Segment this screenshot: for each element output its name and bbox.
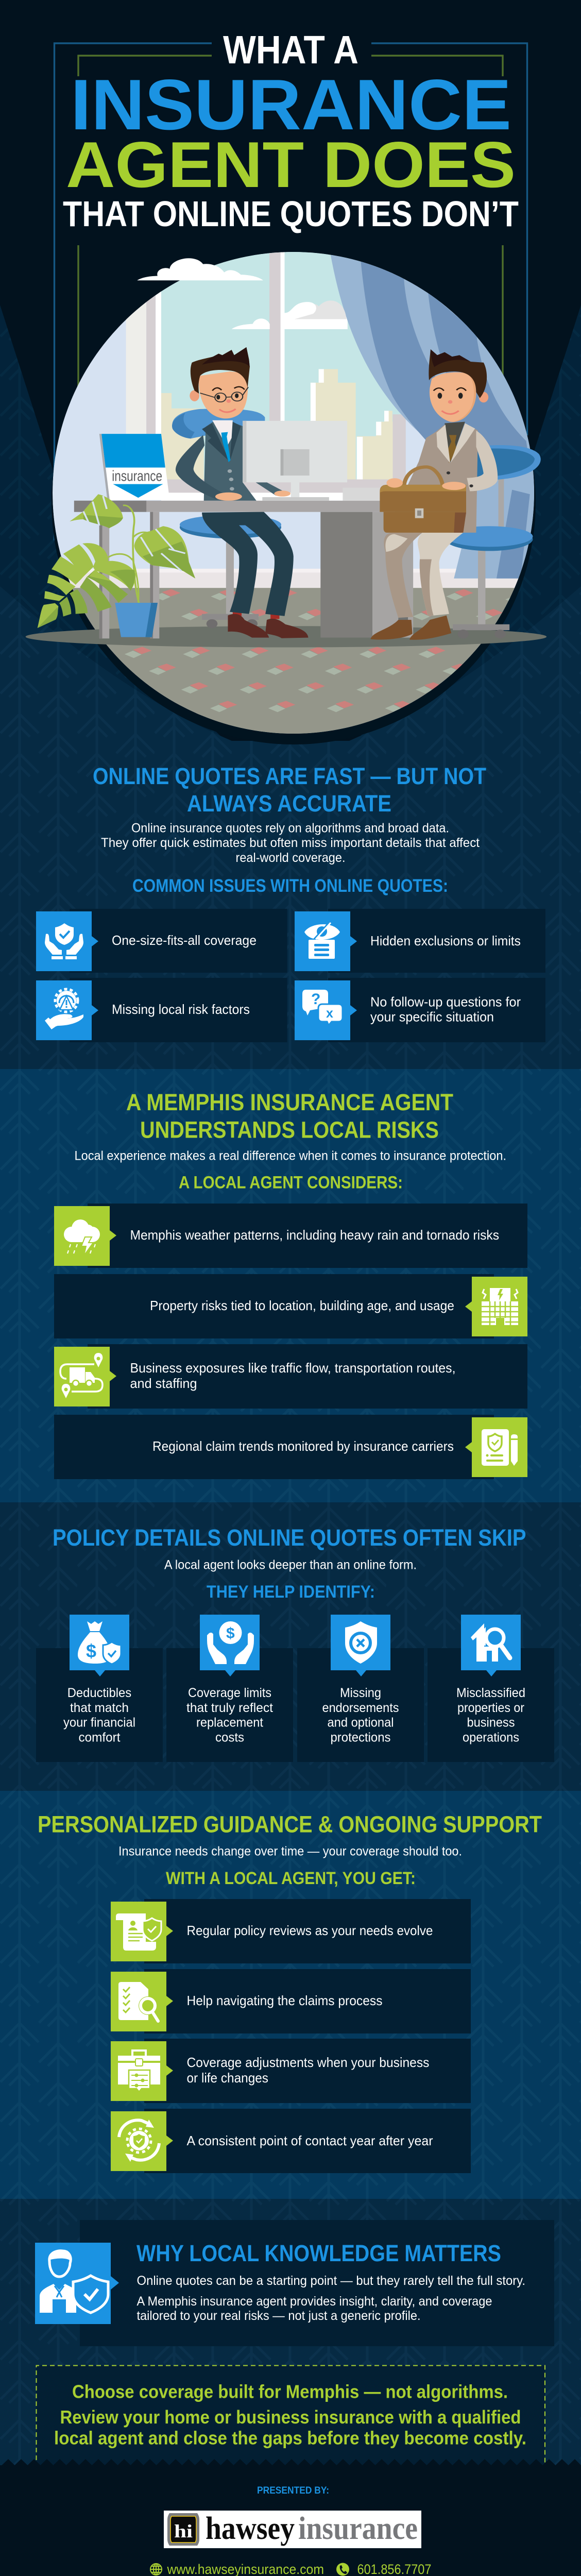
callout: call to action: Choose coverage built for Memphis — not algorithms. xyxy=(72,2381,508,2402)
icon: briefcase and settings document xyxy=(118,2050,160,2092)
clouds xyxy=(137,258,270,329)
callout: call to action: Review your home or business insurance with a qualified xyxy=(60,2406,521,2428)
card: missing endorsements: protections xyxy=(331,1730,390,1744)
heading xyxy=(126,1089,453,1143)
icon: hands holding coin xyxy=(207,1621,254,1664)
row: claims process xyxy=(111,1969,471,2033)
card: no follow-up questions: your specific situation xyxy=(370,1009,494,1024)
client chair xyxy=(446,445,541,638)
footer xyxy=(0,2459,581,2576)
body text xyxy=(137,2274,525,2323)
card: misclassified properties xyxy=(428,1615,554,1762)
desk sign: insurance: insurance xyxy=(112,468,162,484)
heading: ALWAYS ACCURATE xyxy=(187,790,391,817)
title xyxy=(63,28,519,234)
body text: A Memphis insurance agent provides insight, clarity, and coverage xyxy=(137,2294,492,2309)
card: no follow-up questions: No follow-up questions for xyxy=(370,994,521,1010)
plant leaf: large lower xyxy=(38,543,158,637)
card: coverage limits: replacement xyxy=(196,1716,263,1730)
card: coverage limits: that truly reflect xyxy=(186,1701,273,1715)
body text: tailored to your real risks — not just a generic profile. xyxy=(137,2309,420,2323)
subheading: A LOCAL AGENT CONSIDERS: xyxy=(179,1173,403,1192)
icon: gear warning on hand xyxy=(45,989,83,1029)
briefcase xyxy=(380,467,466,533)
icon: house and magnifier xyxy=(471,1623,510,1662)
card: deductibles: your financial xyxy=(63,1716,135,1730)
panel: section two background xyxy=(0,1069,581,1502)
intro text: A local agent looks deeper than an online form. xyxy=(164,1558,417,1572)
icon: speech bubbles xyxy=(302,990,343,1025)
heading: A MEMPHIS INSURANCE AGENT xyxy=(126,1089,453,1115)
panel: section four background xyxy=(0,1791,581,2199)
heading: WHY LOCAL KNOWLEDGE MATTERS xyxy=(136,2240,501,2266)
card: misclassified properties: operations xyxy=(463,1730,519,1744)
header background xyxy=(0,0,581,757)
subheading: WITH A LOCAL AGENT, YOU GET: xyxy=(166,1869,416,1888)
icon: hands holding coin: $ xyxy=(226,1625,235,1642)
icon: eye and document xyxy=(304,923,340,959)
intro text xyxy=(101,821,480,865)
agent head xyxy=(190,347,250,418)
baseboard and floor xyxy=(88,569,522,573)
row: property risks xyxy=(54,1274,527,1338)
title frame lines xyxy=(55,43,527,539)
card: coverage limits: Coverage limits xyxy=(188,1686,271,1700)
window curtain xyxy=(331,255,534,579)
row: business exposures xyxy=(54,1344,527,1409)
icon: speech bubbles: ? xyxy=(311,991,320,1008)
row: claims process: Help navigating the claims process xyxy=(186,1993,382,2008)
intro text: Local experience makes a real difference when it comes to insurance protection. xyxy=(74,1149,506,1163)
icon: money bag and shield: $ xyxy=(86,1640,96,1662)
icon: delivery route xyxy=(60,1353,102,1398)
heading: UNDERSTANDS LOCAL RISKS xyxy=(140,1117,439,1143)
icon: logo badge: hi xyxy=(174,2521,193,2541)
icon: phone xyxy=(336,2563,349,2576)
subheading: COMMON ISSUES WITH ONLINE QUOTES: xyxy=(132,876,448,896)
plant leaf: upper left xyxy=(70,494,123,528)
card: misclassified properties: properties or xyxy=(457,1701,524,1715)
row: coverage adjustments: Coverage adjustments when your business xyxy=(186,2055,430,2070)
callout: call to action xyxy=(36,2366,545,2469)
title: INSURANCE xyxy=(71,65,511,145)
card: missing endorsements: and optional xyxy=(328,1716,394,1730)
card: one-size-fits-all xyxy=(36,909,287,973)
callout: call to action: local agent and close the gaps before they become costly. xyxy=(54,2428,526,2448)
logo: hawsey insurance: hawsey xyxy=(206,2511,295,2546)
icon: storm cloud xyxy=(64,1219,100,1256)
card: no follow-up questions xyxy=(295,978,545,1042)
row: weather patterns: Memphis weather patterns, including heavy rain and tornado risks xyxy=(130,1227,499,1243)
agent trousers and shoes xyxy=(202,512,309,638)
curtain: right backdrop xyxy=(349,305,581,747)
body text: Online quotes can be a starting point — but they rarely tell the full story. xyxy=(137,2274,525,2288)
card: misclassified properties: business xyxy=(467,1716,515,1730)
icon: speech bubbles: x xyxy=(326,1006,333,1021)
skyline buildings xyxy=(161,369,394,483)
section three: policy details xyxy=(36,1524,554,1762)
icon: globe xyxy=(150,2564,162,2575)
logo: hawsey insurance xyxy=(164,2511,421,2548)
intro text: They offer quick estimates but often miss important details that affect xyxy=(101,836,480,850)
title: WHAT A xyxy=(223,28,358,72)
icon: policy scroll and shield xyxy=(116,1913,161,1951)
section five: why local knowledge matters xyxy=(35,2220,554,2346)
heading xyxy=(93,763,486,817)
panel: section five background xyxy=(0,2199,581,2467)
icon: agent with shield xyxy=(40,2250,108,2313)
card: hidden exclusions xyxy=(295,909,545,973)
row: policy reviews xyxy=(111,1899,471,1963)
row: coverage adjustments xyxy=(111,2039,471,2103)
agent chair back xyxy=(172,409,265,438)
section four: personalized guidance xyxy=(38,1811,542,2173)
icon: gear shield cycle xyxy=(119,2120,159,2162)
desk xyxy=(74,501,413,638)
subheading: THEY HELP IDENTIFY: xyxy=(207,1582,375,1602)
illustration: office scene xyxy=(26,246,556,736)
card: hidden exclusions: Hidden exclusions or limits xyxy=(370,933,521,948)
presented by label: PRESENTED BY: xyxy=(257,2485,329,2496)
section two: local risks xyxy=(54,1089,527,1479)
agent stool xyxy=(180,515,281,628)
row: business exposures: and staffing xyxy=(130,1376,197,1391)
title: THAT ONLINE QUOTES DON’T xyxy=(63,194,519,234)
card: deductibles xyxy=(36,1615,163,1762)
wall and window scene xyxy=(37,246,556,736)
card: missing endorsements xyxy=(297,1615,424,1762)
card: coverage limits: costs xyxy=(215,1730,244,1744)
icon: damaged building xyxy=(482,1288,518,1325)
floor tiles xyxy=(125,589,533,712)
title: AGENT DOES xyxy=(66,128,516,201)
intro text: real-world coverage. xyxy=(236,851,345,865)
row: regional claim trends xyxy=(54,1415,527,1479)
desk sign: insurance xyxy=(99,434,169,501)
icon: shield in hands xyxy=(45,923,83,959)
icon: shield with x xyxy=(345,1621,377,1664)
heading: POLICY DETAILS ONLINE QUOTES OFTEN SKIP xyxy=(53,1524,526,1551)
row: coverage adjustments: or life changes xyxy=(186,2070,268,2086)
icon: document with shield and pencil xyxy=(482,1429,518,1466)
agent body xyxy=(176,420,290,501)
card: deductibles: that match xyxy=(70,1701,129,1715)
intro text: Online insurance quotes rely on algorithms and broad data. xyxy=(131,821,449,836)
panel: section one background xyxy=(0,586,581,1069)
section one: online quotes xyxy=(36,763,545,1042)
row: consistent contact: A consistent point of contact year after year xyxy=(186,2133,433,2148)
circle drop shadow xyxy=(52,260,536,744)
card: missing local risk: Missing local risk factors xyxy=(112,1002,250,1017)
card: one-size-fits-all: One-size-fits-all coverage xyxy=(112,933,257,948)
row: consistent contact xyxy=(111,2109,471,2173)
icon: checklist and magnifier xyxy=(118,1982,158,2021)
floor shadow xyxy=(26,626,546,648)
window frames xyxy=(126,302,146,434)
icon: money bag and shield xyxy=(78,1621,121,1664)
card: coverage limits xyxy=(166,1615,293,1762)
card: missing endorsements: Missing xyxy=(340,1686,381,1700)
row: weather patterns xyxy=(54,1204,527,1268)
row: regional claim trends: Regional claim trends monitored by insurance carriers xyxy=(152,1438,454,1454)
card: missing local risk xyxy=(36,978,287,1042)
row: policy reviews: Regular policy reviews as your needs evolve xyxy=(186,1923,433,1938)
card: deductibles: comfort xyxy=(78,1730,121,1744)
row: business exposures: Business exposures like traffic flow, transportation routes, xyxy=(130,1360,455,1376)
icon: logo badge xyxy=(167,2513,199,2546)
heading: ONLINE QUOTES ARE FAST — BUT NOT xyxy=(93,763,486,789)
logo: hawsey insurance: insurance xyxy=(298,2511,418,2546)
client figure xyxy=(370,349,498,640)
plant stems xyxy=(123,505,152,603)
row: property risks: Property risks tied to location, building age, and usage xyxy=(150,1298,454,1313)
card: missing endorsements: endorsements xyxy=(322,1701,399,1715)
card: deductibles: Deductibles xyxy=(67,1686,131,1700)
plant leaf: upper right xyxy=(134,526,195,579)
intro text: Insurance needs change over time — your coverage should too. xyxy=(118,1844,462,1859)
panel: section three background xyxy=(0,1502,581,1791)
computer monitor xyxy=(243,421,380,501)
curtain: left backdrop xyxy=(0,305,232,747)
card: misclassified properties: Misclassified xyxy=(456,1686,525,1700)
